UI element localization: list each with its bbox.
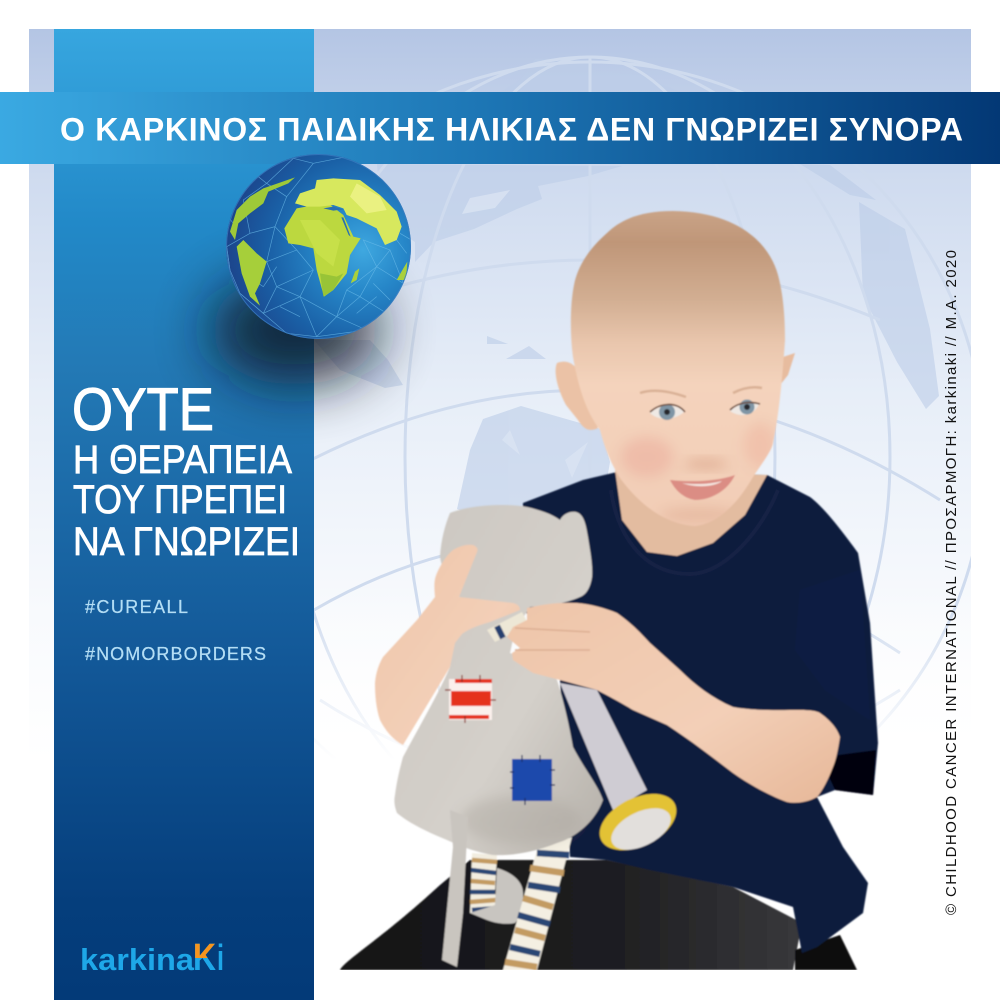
- toy leg: short striped: [470, 853, 500, 913]
- logo: karkinaki: i: [217, 937, 224, 978]
- background world map: [314, 56, 971, 728]
- left sidebar: [54, 29, 314, 1000]
- logo: karkinaki: [82, 944, 222, 970]
- toy blue patch: [510, 755, 555, 805]
- right ear: [780, 353, 795, 385]
- heading: Η ΘΕΡΑΠΕΙΑ ΤΟΥ ΠΡΕΠΕΙ ΝΑ ΓΝΩΡΙΖΕΙ: Η ΘΕΡΑΠΕΙΑ: [73, 438, 292, 482]
- eyes: [640, 387, 762, 420]
- toy head and body: [394, 505, 603, 855]
- globe shadow: [210, 275, 380, 385]
- child's right hand and arm: [507, 603, 840, 803]
- head: [571, 211, 785, 526]
- hashtags: #CUREALL: [85, 597, 188, 617]
- toy neck ribbon: [487, 612, 529, 642]
- photo: child holding a toy: [340, 211, 878, 970]
- hashtags: #NOMORBORDERS: [85, 644, 266, 664]
- logo: karkinaki: K: [193, 937, 216, 979]
- mouth: [670, 475, 735, 500]
- heading: Η ΘΕΡΑΠΕΙΑ ΤΟΥ ΠΡΕΠΕΙ ΝΑ ΓΝΩΡΙΖΕΙ: ΤΟΥ ΠΡΕΠΕΙ: [73, 478, 287, 522]
- t-shirt: [520, 472, 878, 953]
- header band: [0, 92, 1000, 164]
- dark chair: [795, 935, 857, 970]
- logo: karkinaki: karkina: [80, 942, 195, 977]
- trousers: [340, 860, 802, 970]
- icon: globe: [220, 154, 411, 339]
- globe wire mesh: [220, 157, 411, 337]
- finger lines: [515, 628, 590, 650]
- heading: Η ΘΕΡΑΠΕΙΑ ΤΟΥ ΠΡΕΠΕΙ ΝΑ ΓΝΩΡΙΖΕΙ: ΝΑ ΓΝΩΡΙΖΕΙ: [73, 520, 300, 564]
- toy head seam shading: [460, 796, 580, 844]
- toy tail: [442, 810, 468, 967]
- child's left arm and hand: [375, 545, 520, 745]
- toy arm with yellow cuff: [560, 683, 685, 862]
- toy leg: long striped: [503, 837, 572, 970]
- neck: [615, 470, 767, 556]
- title: Ο ΚΑΡΚΙΝΟΣ ΠΑΙΔΙΚΗΣ ΗΛΙΚΙΑΣ ΔΕΝ ΓΝΩΡΙΖΕΙ ΣΥΝΟΡΑ: [60, 112, 963, 148]
- hashtags: [85, 597, 266, 664]
- toy foot: [470, 868, 523, 924]
- left ear: [556, 362, 598, 430]
- collar: [611, 490, 778, 574]
- heading: Η ΘΕΡΑΠΕΙΑ ΤΟΥ ΠΡΕΠΕΙ ΝΑ ΓΝΩΡΙΖΕΙ: [73, 438, 300, 564]
- toy red patch: [445, 675, 496, 723]
- shirt sleeve shading: [795, 570, 870, 720]
- heading: ΟΥΤΕ: ΟΥΤΕ: [72, 376, 214, 443]
- globe continents: [230, 177, 407, 306]
- credit text: © CHILDHOOD CANCER INTERNATIONAL // ΠΡΟΣΑΡΜΟΓΗ: karkinaki // M.A. 2020: [943, 250, 960, 915]
- logo: karkinaki: K: [193, 937, 216, 979]
